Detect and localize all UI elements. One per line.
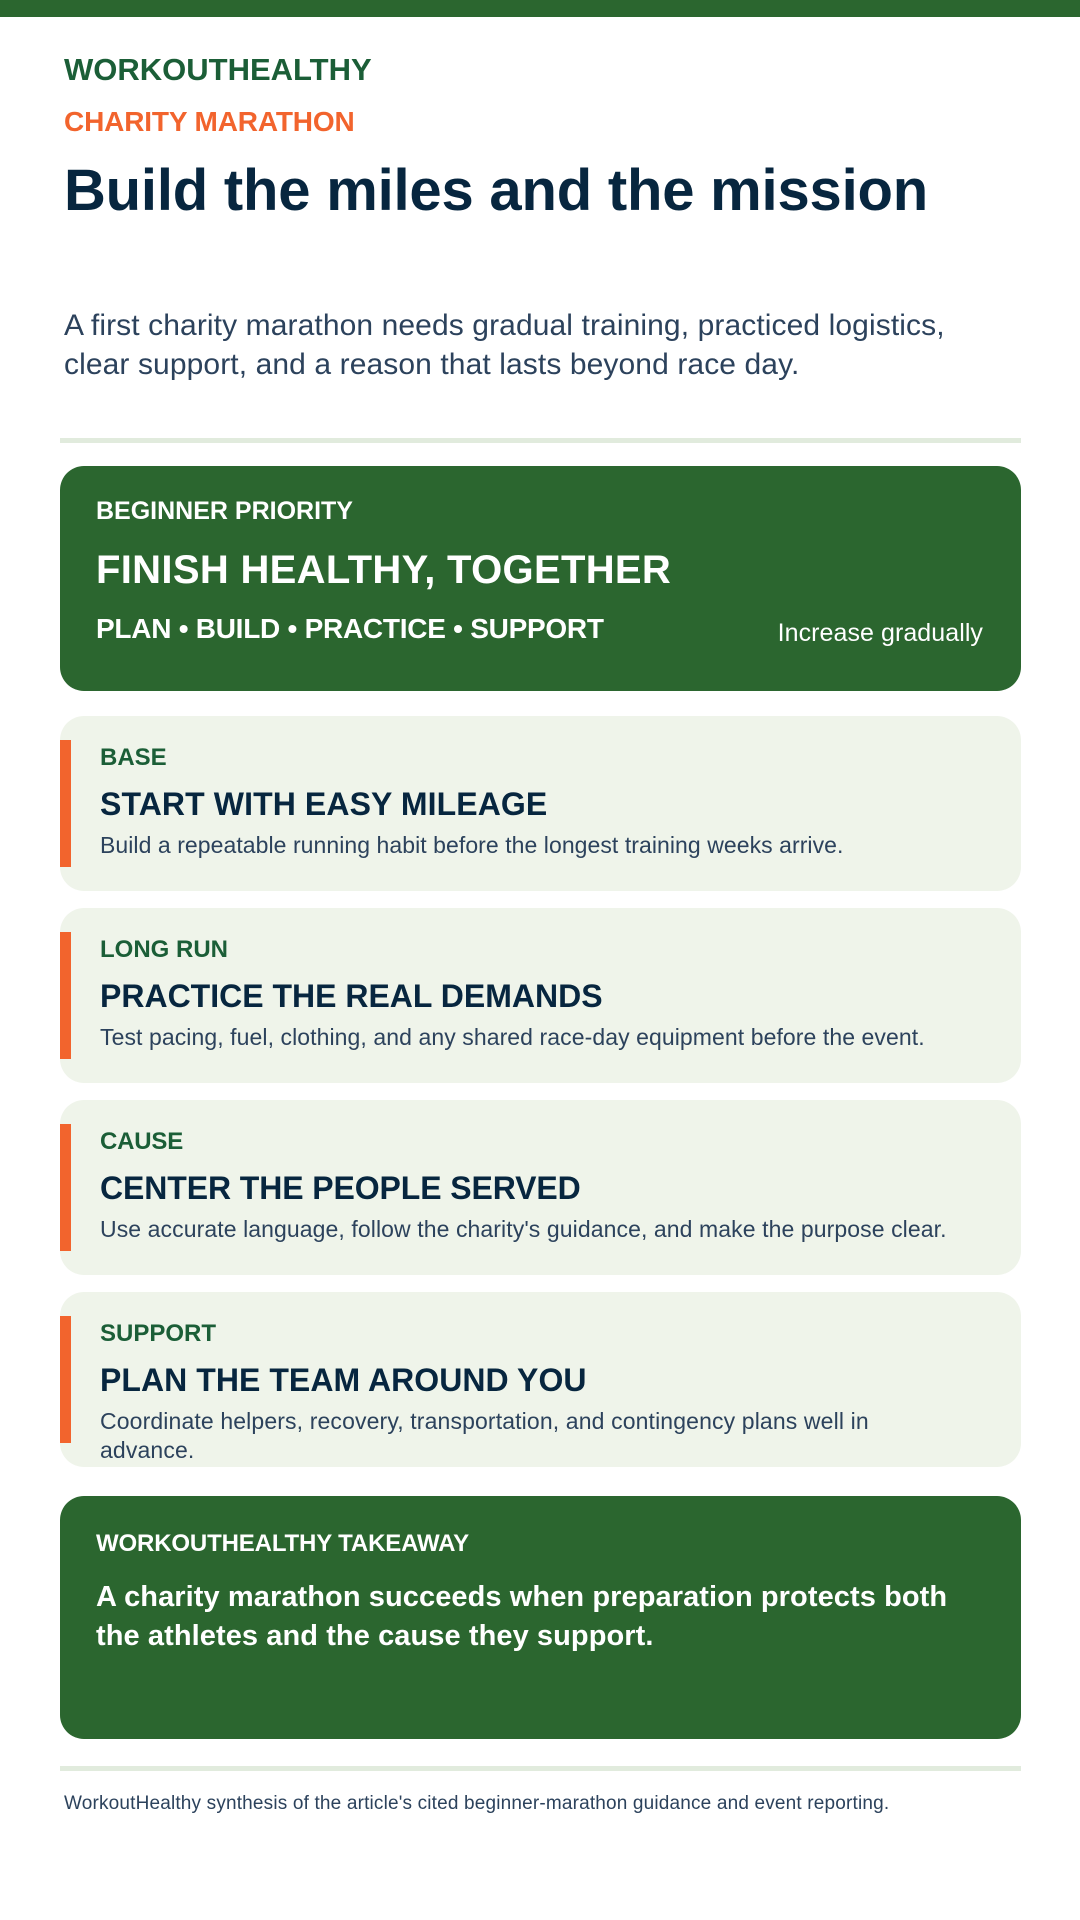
card label: BASE [100,744,167,771]
card label: CAUSE [100,1128,183,1155]
card text: Build a repeatable running habit before the longest training weeks arrive. [100,832,843,858]
accent bar [60,932,71,1059]
accent bar [60,740,71,867]
title: Build the miles and the mission [64,158,928,223]
panel: beginner priority [60,466,1021,691]
card heading: PRACTICE THE REAL DEMANDS [100,978,603,1014]
panel headline: FINISH HEALTHY, TOGETHER [96,548,671,592]
card: support [60,1292,1021,1467]
accent bar [60,1124,71,1251]
accent bar [60,1316,71,1443]
card text: Use accurate language, follow the charity's guidance, and make the purpose clear. [100,1216,947,1242]
step sequence: PLAN • BUILD • PRACTICE • SUPPORT [96,613,604,644]
card label: LONG RUN [100,936,228,963]
panel label: WORKOUTHEALTHY TAKEAWAY [96,1530,469,1557]
footer source note: WorkoutHealthy synthesis of the article's cited beginner-marathon guidance and event reporting. [64,1793,889,1814]
side note: Increase gradually [778,619,983,647]
panel label: BEGINNER PRIORITY [96,497,353,525]
takeaway text: A charity marathon succeeds when preparation protects both the athletes and the cause they support. [96,1581,947,1652]
card: base [60,716,1021,891]
card text: Test pacing, fuel, clothing, and any shared race-day equipment before the event. [100,1024,925,1050]
card: long run [60,908,1021,1083]
card label: SUPPORT [100,1320,216,1347]
eyebrow: CHARITY MARATHON [64,106,355,137]
intro text: A first charity marathon needs gradual training, practiced logistics, clear support, and a reason that lasts beyond race day. [64,309,945,381]
card heading: PLAN THE TEAM AROUND YOU [100,1362,587,1398]
card heading: START WITH EASY MILEAGE [100,786,547,822]
card heading: CENTER THE PEOPLE SERVED [100,1170,581,1206]
panel: takeaway [60,1496,1021,1739]
top bar [0,0,1080,17]
card: cause [60,1100,1021,1275]
brand name: WORKOUTHEALTHY [64,52,372,87]
card text: Coordinate helpers, recovery, transportation, and contingency plans well in advance. [100,1408,869,1463]
